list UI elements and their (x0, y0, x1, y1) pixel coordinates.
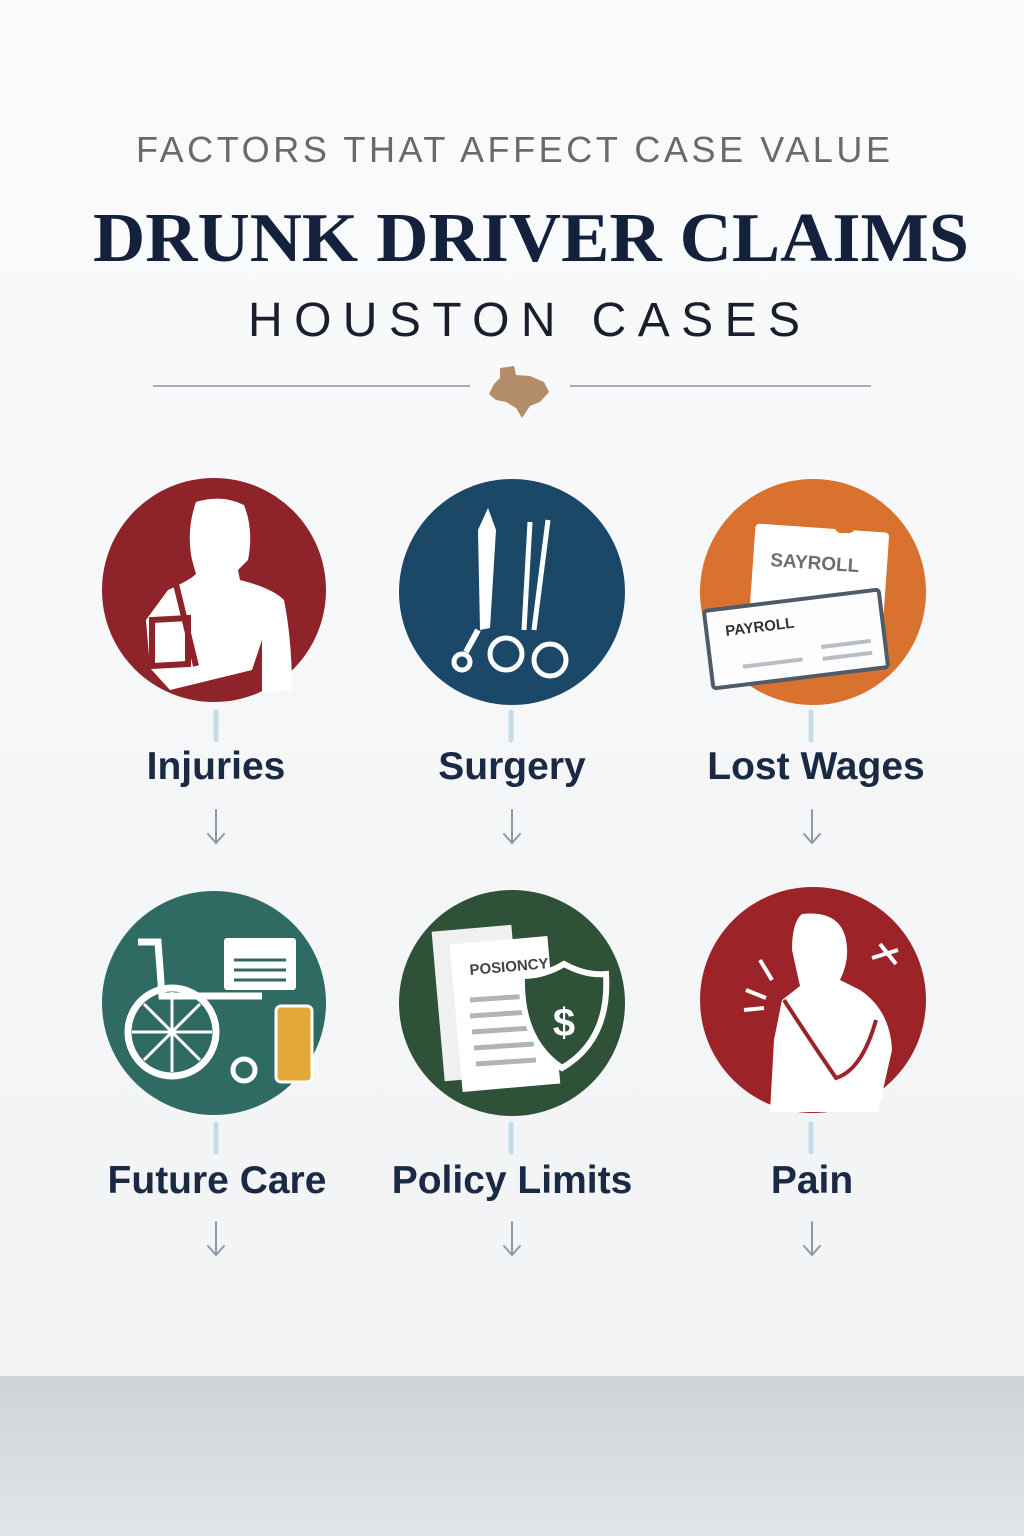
label: Pain (771, 1159, 853, 1202)
title: DRUNK DRIVER CLAIMS (93, 200, 969, 277)
label: Surgery (438, 745, 586, 788)
factor: policy limits: POSIONCY (469, 955, 549, 979)
label: Future Care (108, 1159, 326, 1202)
factor: future care (102, 891, 326, 1202)
floor band (0, 1376, 1024, 1536)
subtitle: FACTORS THAT AFFECT CASE VALUE (136, 129, 890, 170)
factor: surgery (399, 479, 625, 788)
factor: policy limits: $ (553, 1001, 575, 1045)
arrows (208, 712, 820, 1255)
label: Injuries (147, 745, 285, 788)
factor: lost wages: PAYROLL (724, 615, 795, 640)
factor: lost wages: SAYROLL (770, 550, 860, 577)
label: Lost Wages (707, 745, 925, 788)
icon: texas (489, 366, 549, 418)
factor: injuries (102, 478, 326, 788)
factor: policy limits (392, 890, 632, 1202)
label: Policy Limits (392, 1159, 632, 1202)
factor: lost wages (700, 479, 926, 788)
heading: houston cases: HOUSTON CASES (248, 294, 800, 347)
factor: pain (700, 887, 926, 1202)
